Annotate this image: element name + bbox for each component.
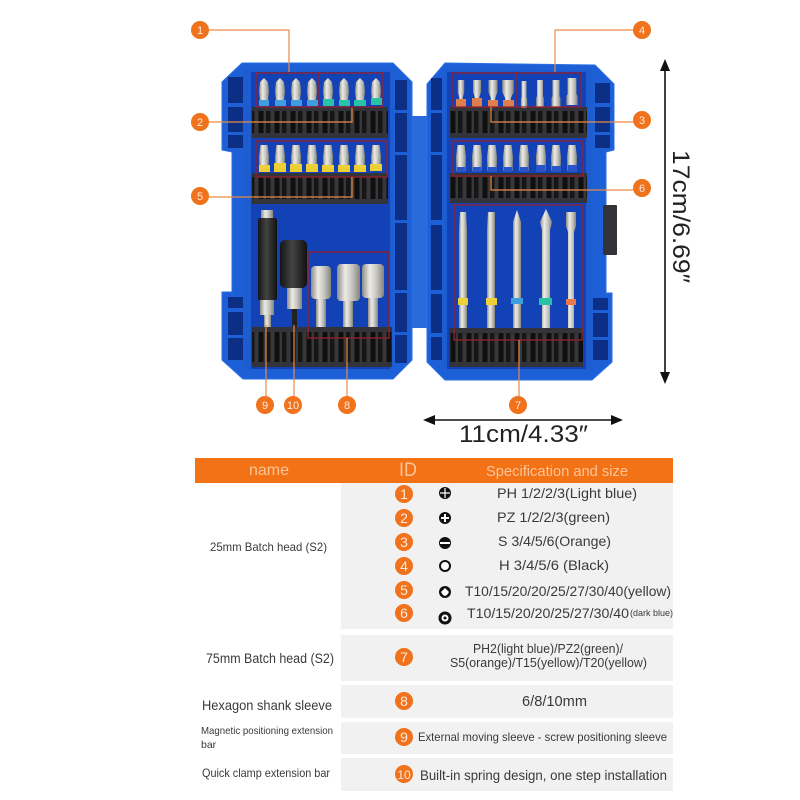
icon: hex xyxy=(440,561,450,571)
icon: phillips xyxy=(439,487,451,499)
callout numbers: 2 xyxy=(197,117,203,129)
table row: 75mm bits: 7 xyxy=(400,649,408,665)
table row: 25mm bits: 25mm Batch head (S2) xyxy=(210,540,327,554)
table row: hexagon shank sleeve: Hexagon shank sleeve xyxy=(202,697,332,713)
callout numbers: 10 xyxy=(287,400,299,412)
table row: 25mm bits: 2 xyxy=(400,510,408,526)
table row: hexagon shank sleeve xyxy=(202,685,673,718)
arrow: height dimension xyxy=(660,59,670,384)
table header: name xyxy=(249,462,289,479)
magnetic extension bar xyxy=(258,210,277,327)
table row: 75mm bits: S5(orange)/T15(yellow)/T20(yellow) xyxy=(450,656,647,670)
table row: 25mm bits: H 3/4/5/6 (Black) xyxy=(499,557,609,573)
table row: 25mm bits: T10/15/20/20/25/27/30/40 xyxy=(467,606,629,621)
bits row: slotted and hex xyxy=(456,78,578,108)
callout numbers xyxy=(191,21,651,414)
icon: torx xyxy=(439,586,451,598)
table row: 25mm bits: 1 xyxy=(400,486,408,502)
table row: 25mm bits: PZ 1/2/2/3(green) xyxy=(497,509,610,525)
left case xyxy=(222,63,412,379)
leader lines xyxy=(209,30,633,396)
icon: security torx xyxy=(438,612,452,624)
bits row: yellow torx xyxy=(259,145,382,172)
table row: 75mm bits: 75mm Batch head (S2) xyxy=(206,651,334,666)
table row: quick clamp extension bar: 10 xyxy=(397,768,411,782)
table row: 75mm bits: PH2(light blue)/PZ2(green)/ xyxy=(473,642,624,656)
table row: magnetic extension bar: 9 xyxy=(400,729,408,745)
table row: 25mm bits: (dark blue) xyxy=(630,608,673,619)
table row: quick clamp extension bar xyxy=(202,758,673,791)
table row: 25mm bits: 5 xyxy=(400,582,408,598)
table row: 25mm bits: 4 xyxy=(400,558,408,574)
table row: hexagon shank sleeve: 6/8/10mm xyxy=(522,693,587,710)
table row: magnetic extension bar: bar xyxy=(201,739,217,751)
long 75mm bits xyxy=(458,209,576,328)
quick clamp extension bar xyxy=(280,240,307,327)
table row: 25mm bits: S 3/4/5/6(Orange) xyxy=(498,533,611,549)
table row: hexagon shank sleeve: 8 xyxy=(400,693,408,709)
callout numbers: 8 xyxy=(344,400,350,412)
table row: magnetic extension bar xyxy=(201,722,673,754)
icon: slotted xyxy=(439,537,451,549)
callout numbers: 1 xyxy=(197,25,203,37)
table header: Specification and size xyxy=(486,463,628,480)
accessory clip xyxy=(603,205,617,255)
table row: magnetic extension bar: External moving sleeve - screw positioning sleeve xyxy=(418,730,667,744)
callout numbers: 5 xyxy=(197,191,203,203)
width label: 11cm/4.33″ xyxy=(459,421,589,448)
red highlight boxes xyxy=(256,73,583,340)
icon: pozidriv xyxy=(439,512,451,524)
table row: 25mm bits: T10/15/20/20/25/27/30/40(yellow) xyxy=(465,584,671,599)
callout numbers: 3 xyxy=(639,115,645,127)
callout numbers: 9 xyxy=(262,400,268,412)
right case xyxy=(427,63,614,380)
table row: 25mm bits xyxy=(210,483,673,629)
bits row: dark blue torx xyxy=(456,145,577,172)
callout numbers: 6 xyxy=(639,183,645,195)
table row: 25mm bits: 6 xyxy=(400,605,408,621)
callout numbers: 7 xyxy=(515,400,521,412)
callout numbers: 4 xyxy=(639,25,645,37)
hinge xyxy=(412,116,427,328)
table row: quick clamp extension bar: Quick clamp extension bar xyxy=(202,766,330,780)
racks xyxy=(252,107,587,367)
table row: magnetic extension bar: Magnetic positioning extension xyxy=(201,725,333,737)
table row: quick clamp extension bar: Built-in spring design, one step installation xyxy=(420,767,667,783)
table header xyxy=(195,458,673,483)
bits row: PH and PZ xyxy=(259,78,382,106)
table row: 75mm bits xyxy=(206,635,673,681)
table row: 25mm bits: 3 xyxy=(400,534,408,550)
height label: 17cm/6.69″ xyxy=(667,150,694,284)
arrow: width dimension xyxy=(423,415,623,425)
hex sockets xyxy=(311,264,384,327)
table header: ID xyxy=(399,460,417,481)
table row: 25mm bits: PH 1/2/2/3(Light blue) xyxy=(497,485,637,501)
